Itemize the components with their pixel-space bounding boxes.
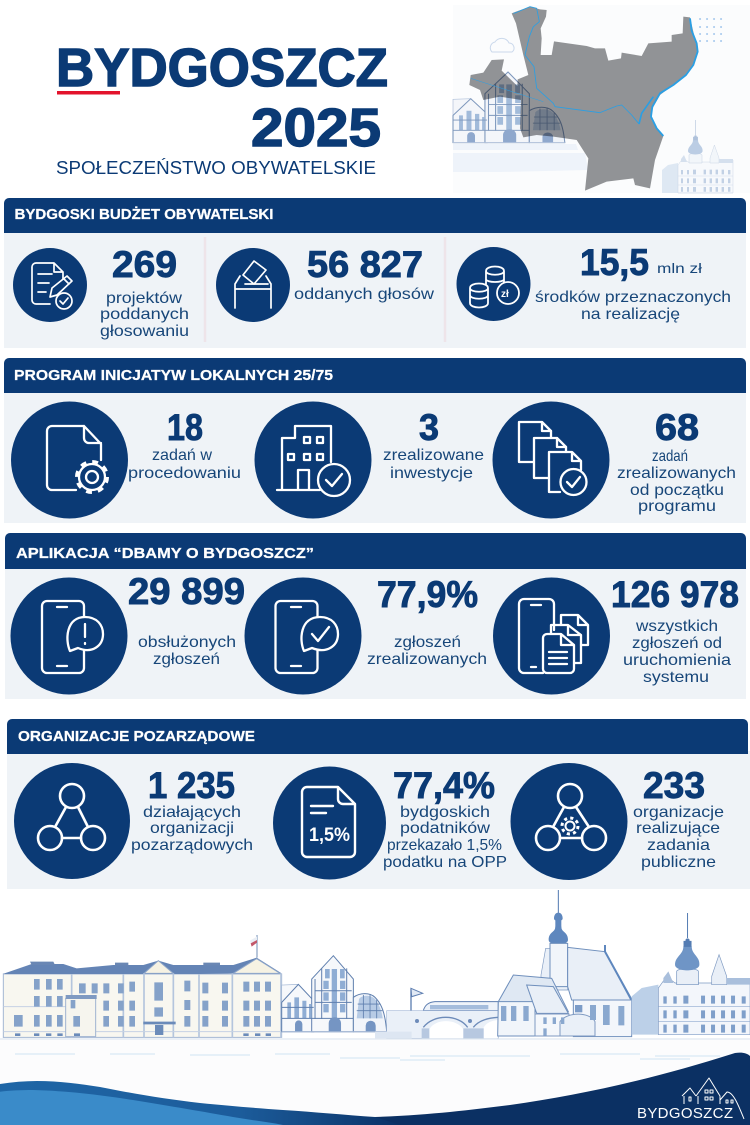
stat: 233 organisations: organizacje <box>633 804 724 821</box>
stat: 15,5 mln zł: mln zł <box>657 260 703 276</box>
icon: ballot box <box>216 248 290 322</box>
panel background <box>4 230 746 348</box>
stat: 233 organisations <box>633 765 724 871</box>
stat: 29 899 handled <box>128 571 245 668</box>
section header <box>7 719 748 754</box>
school building <box>3 958 282 1037</box>
stat: 77,4% taxpayers: bydgoskich <box>400 804 490 821</box>
rivers <box>471 7 698 136</box>
stat: 15,5 mln zł: na realizację <box>581 306 680 323</box>
section header: PROGRAM INICJATYW LOKALNYCH 25/75 <box>14 368 333 384</box>
city skyline illustration <box>0 890 750 1125</box>
stat: 77,9% completed: zrealizowanych <box>367 651 487 668</box>
stat: 233 organisations: zadania <box>647 837 710 854</box>
stat: 77,9% completed: zgłoszeń <box>394 634 461 651</box>
stat: 233 organisations: 233 <box>643 765 705 806</box>
stat: 1 235 organisations: pozarządowych <box>131 837 253 854</box>
panel: Bydgoski Budżet Obywatelski <box>4 198 746 348</box>
decorative cloud <box>490 38 514 52</box>
stat: 68 tasks: zadań <box>652 448 688 465</box>
stat: 269 projects: poddanych <box>100 306 189 323</box>
panel: Organizacje Pozarządowe <box>7 719 750 889</box>
panel: Aplikacja Dbamy o Bydgoszcz <box>5 533 746 699</box>
stat: 126 978 total: 126 978 <box>611 574 739 615</box>
half-timbered houses <box>282 956 387 1032</box>
icon: document with gear <box>11 402 128 518</box>
stat: 18 tasks: zadań w <box>152 447 212 464</box>
wave: light blue <box>0 1090 283 1125</box>
icon: stacked documents with check <box>492 402 610 518</box>
icon: coins <box>456 247 530 321</box>
stat: 269 projects: 269 <box>112 244 177 285</box>
palace sketch <box>662 120 733 193</box>
icon: tax document 1,5%: 1,5% <box>309 825 350 846</box>
stat: 269 projects: projektów <box>106 290 182 307</box>
stat: 126 978 total: wszystkich <box>635 618 718 635</box>
stat: 56 827 votes <box>294 244 435 303</box>
quay and water reflection <box>453 144 588 172</box>
stat: 29 899 handled: zgłoszeń <box>153 651 220 668</box>
stat: 126 978 total <box>611 574 739 686</box>
stat: 68 tasks <box>617 407 736 515</box>
city area <box>469 7 697 191</box>
stat: 3 investments: zrealizowane <box>383 447 484 464</box>
title: Bydgoszcz: BYDGOSZCZ <box>56 38 388 98</box>
stat: 1 235 organisations: 1 235 <box>148 765 235 806</box>
stat: 77,9% completed: 77,9% <box>377 574 478 615</box>
stat: 68 tasks: programu <box>638 498 716 515</box>
stat: 68 tasks: zrealizowanych <box>617 465 736 482</box>
section header <box>4 358 746 393</box>
stat: 126 978 total: systemu <box>643 669 709 686</box>
stat: 56 827 votes: 56 827 <box>307 244 423 285</box>
bottom wave <box>0 1053 750 1125</box>
wave: dark right section <box>300 1053 750 1125</box>
title block <box>56 38 388 178</box>
stat: 29 899 handled: obsłużonych <box>138 634 236 651</box>
panel background <box>7 751 750 889</box>
wave: blue band <box>0 1081 400 1125</box>
stat: 126 978 total: zgłoszeń od <box>632 635 722 652</box>
stat: 15,5 mln zł: środków przeznaczonych <box>535 289 731 306</box>
stat: 77,4% taxpayers: podatników <box>400 820 490 837</box>
panel background <box>5 566 746 699</box>
section header <box>4 198 746 233</box>
flag <box>250 935 257 958</box>
stat: 126 978 total: uruchomienia <box>623 652 731 669</box>
title: year 2025: 2025 <box>251 98 381 158</box>
stat: 29 899 handled: 29 899 <box>128 571 245 612</box>
icon: tax document 1,5% <box>273 766 386 880</box>
Bydgoszcz logo <box>637 1078 744 1122</box>
stat: 18 tasks: 18 <box>167 407 203 448</box>
stat: 233 organisations: realizujące <box>636 820 720 837</box>
stat: 56 827 votes: oddanych głosów <box>294 286 435 303</box>
palace <box>632 913 750 1035</box>
dotted pattern <box>700 19 721 41</box>
stat: 68 tasks: 68 <box>655 407 699 448</box>
stat: 233 organisations: publiczne <box>641 854 716 871</box>
logo wordmark: BYDGOSZCZ <box>637 1105 733 1122</box>
stat: 77,9% completed <box>367 574 487 668</box>
panel: Program Inicjatyw Lokalnych 25/75 <box>4 358 746 523</box>
stat: 18 tasks: procedowaniu <box>128 465 241 482</box>
icon: coins: zł <box>501 289 509 300</box>
icon: network triangle <box>14 763 130 879</box>
stat: 77,4% taxpayers: podatku na OPP <box>383 854 507 871</box>
logo houses <box>682 1078 744 1119</box>
ground haze <box>0 1040 750 1125</box>
icon: building with check <box>254 402 372 518</box>
church <box>498 890 632 1037</box>
icon: phone with check <box>244 578 362 694</box>
stat: 18 tasks <box>128 407 241 482</box>
bridge with train <box>375 988 498 1038</box>
stat: 1 235 organisations <box>131 765 253 854</box>
section header: ORGANIZACJE POZARZĄDOWE <box>18 729 255 745</box>
dividers <box>205 237 445 342</box>
stat: 1 235 organisations: organizacji <box>150 820 234 837</box>
half-timbered granaries <box>453 72 565 143</box>
stat: 15,5 mln zł: 15,5 <box>580 242 649 283</box>
stat: 77,4% taxpayers <box>383 765 507 871</box>
icon: phone with exclamation <box>10 578 128 694</box>
stat: 1 235 organisations: działających <box>143 804 241 821</box>
stat: 3 investments <box>383 407 484 482</box>
stat: 3 investments: inwestycje <box>390 465 473 482</box>
icon: document with pen <box>13 248 87 322</box>
icon: phone with documents <box>493 578 610 694</box>
map of Bydgoszcz <box>453 5 750 193</box>
stat: 68 tasks: od początku <box>630 482 724 499</box>
stat: 269 projects <box>100 244 189 340</box>
stat: 77,4% taxpayers: 77,4% <box>393 765 495 806</box>
section header <box>5 533 746 569</box>
panel background <box>4 390 746 523</box>
water lines <box>15 1054 720 1060</box>
red underline <box>57 91 120 94</box>
stat: 77,4% taxpayers: przekazało 1,5% <box>387 837 502 854</box>
stat: 3 investments: 3 <box>419 407 439 448</box>
stat: 269 projects: głosowaniu <box>100 323 189 340</box>
stat: 15,5 mln zł <box>535 242 731 323</box>
subtitle: SPOŁECZEŃSTWO OBYWATELSKIE <box>56 158 376 178</box>
icon: network with gear <box>510 763 628 880</box>
section header: BYDGOSKI BUDŻET OBYWATELSKI <box>14 206 274 223</box>
section header: APLIKACJA “DBAMY O BYDGOSZCZ” <box>16 546 314 562</box>
